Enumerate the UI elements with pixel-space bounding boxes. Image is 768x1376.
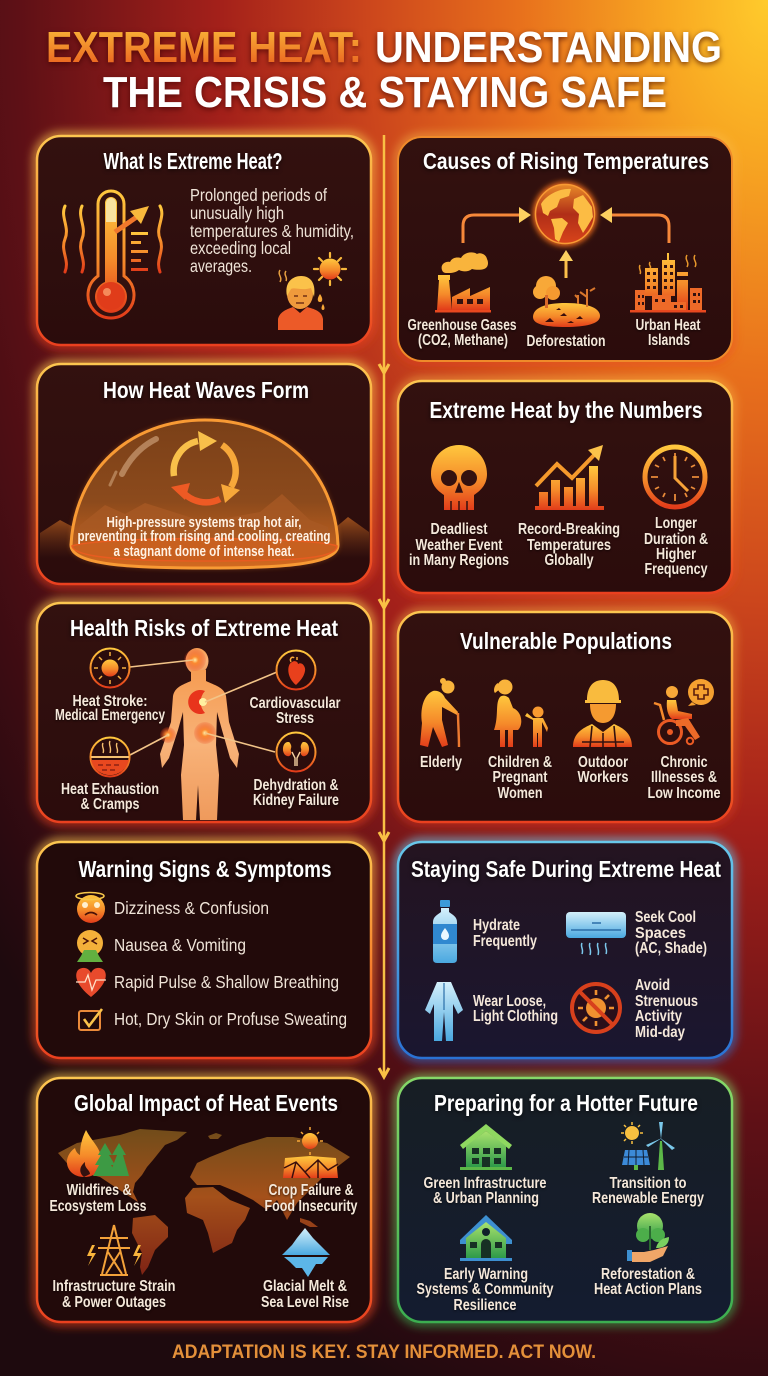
icon: air conditioner [566, 912, 626, 955]
future labels: Systems & Community [416, 1281, 554, 1298]
risk labels: Kidney Failure [253, 792, 339, 809]
safe tip: hydrate: Frequently [473, 933, 537, 950]
icon: pregnant woman and child [494, 680, 548, 747]
symptom: nausea: Nausea & Vomiting [114, 935, 246, 955]
definition text: temperatures & humidity, [190, 221, 354, 241]
risk labels: Heat Stroke: [72, 693, 148, 710]
labels: Urban Heat [636, 317, 701, 334]
future labels: Renewable Energy [592, 1190, 704, 1207]
safe tip: cool spaces [635, 909, 707, 957]
body figure with hot spots [130, 648, 277, 820]
risk labels: & Cramps [80, 796, 140, 813]
risk labels: Cardiovascular [250, 695, 340, 712]
labels: (CO2, Methane) [418, 332, 508, 349]
population labels [420, 754, 721, 802]
labels: Islands [648, 332, 690, 349]
title [46, 23, 722, 117]
stats labels: Frequency [644, 561, 708, 578]
icon: rising chart [535, 445, 604, 510]
panel: global impact [37, 1078, 371, 1322]
heading: Preparing for a Hotter Future [434, 1090, 698, 1116]
icon: drought [283, 1127, 338, 1178]
risk labels: Dehydration & [254, 777, 339, 794]
population labels: Outdoor [578, 754, 628, 771]
stats labels: Record-Breaking [518, 521, 620, 538]
impact labels: Infrastructure Strain [52, 1278, 176, 1295]
icon: city [630, 253, 706, 312]
safe tip: avoid activity: Avoid [635, 977, 670, 994]
population labels: Pregnant [492, 769, 548, 786]
safe tip: hydrate [473, 917, 537, 950]
dome explanation [78, 515, 330, 560]
safe tip: clothing: Wear Loose, [473, 993, 546, 1010]
population labels: Women [498, 785, 542, 802]
icon: globe [533, 182, 597, 246]
icon: sun circle [90, 648, 130, 688]
panel: how heat waves form [37, 364, 371, 584]
icon: power pylon [87, 1225, 142, 1275]
icon: sweating person and sun [278, 253, 346, 330]
icon: elderly [420, 678, 459, 747]
definition text [190, 185, 354, 276]
stats labels: Weather Event [416, 537, 503, 554]
stats labels: in Many Regions [409, 552, 509, 569]
icon: iceberg [282, 1228, 330, 1277]
heading: Causes of Rising Temperatures [423, 148, 709, 174]
heading: Vulnerable Populations [460, 628, 672, 654]
safe tip: cool spaces: (AC, Shade) [635, 940, 707, 957]
symptom: rapid pulse [76, 968, 339, 997]
world map [58, 1129, 350, 1275]
icon: heat exhaustion [90, 738, 130, 776]
icon: deforestation [533, 276, 600, 327]
risk labels: Medical Emergency [55, 707, 165, 724]
impact labels: Food Insecurity [264, 1198, 358, 1215]
future labels [416, 1175, 704, 1314]
panel: preparing for a hotter future [398, 1078, 732, 1322]
icon: kidneys [276, 732, 316, 772]
definition text: Prolonged periods of [190, 185, 327, 205]
labels: Deforestation [526, 333, 606, 350]
icon: clock [645, 447, 705, 507]
panel: by the numbers [398, 381, 732, 593]
dome explanation: a stagnant dome of intense heat. [114, 544, 294, 560]
icon: wheelchair and medical [654, 679, 714, 744]
future labels: Green Infrastructure [424, 1175, 547, 1192]
stats labels: Temperatures [527, 537, 611, 554]
heading: Global Impact of Heat Events [74, 1090, 338, 1116]
risk labels [55, 693, 340, 813]
definition text: unusually high [190, 203, 284, 223]
panel: staying safe [398, 842, 732, 1058]
panel: causes of rising temperatures [398, 137, 732, 361]
future labels: Resilience [454, 1297, 517, 1314]
icon: thermometer [64, 191, 162, 318]
panel: health risks [37, 603, 371, 822]
symptom: hot dry skin: Hot, Dry Skin or Profuse Sweating [114, 1009, 347, 1029]
symptom: dizziness [76, 892, 269, 923]
icon: water bottle [433, 900, 457, 963]
safe tip: avoid activity: Mid-day [635, 1024, 685, 1041]
icon: no midday sun [572, 984, 620, 1032]
future labels: Reforestation & [601, 1266, 695, 1283]
symptom: rapid pulse: Rapid Pulse & Shallow Breathing [114, 972, 339, 992]
panel: what is extreme heat [37, 136, 371, 345]
heading: How Heat Waves Form [103, 377, 309, 403]
stats labels: Globally [544, 552, 594, 569]
heading: Health Risks of Extreme Heat [70, 615, 338, 641]
icon: skull [431, 445, 487, 510]
population labels: Workers [578, 769, 629, 786]
central flow arrow [379, 135, 389, 1077]
icon: loose clothing [425, 982, 463, 1041]
symptom: nausea [77, 930, 246, 962]
icon: green house [460, 1124, 512, 1170]
population labels: Elderly [420, 754, 462, 771]
safe tip: avoid activity [635, 977, 698, 1041]
title: THE CRISIS & STAYING SAFE [103, 68, 667, 117]
safe tip: cool spaces: Seek Cool [635, 909, 696, 926]
icon: hand with plant [627, 1213, 669, 1262]
icon: heart circle [276, 650, 316, 690]
impact labels: Glacial Melt & [263, 1278, 347, 1295]
stats labels: Duration & [644, 531, 708, 548]
panel: vulnerable populations [398, 612, 732, 822]
safe tip: clothing [473, 993, 558, 1025]
risk labels: Stress [276, 710, 314, 727]
safe tip: avoid activity: Strenuous [635, 993, 698, 1010]
icon: wildfire and trees [67, 1130, 129, 1177]
future labels: Heat Action Plans [594, 1281, 702, 1298]
dome explanation: High-pressure systems trap hot air, [106, 515, 302, 531]
stats labels [409, 515, 708, 578]
future labels: Early Warning [444, 1266, 528, 1283]
safe tip: cool spaces: Spaces [635, 925, 686, 942]
population labels: Children & [488, 754, 552, 771]
illustration: heat dome [40, 420, 369, 568]
heading: What Is Extreme Heat? [104, 148, 282, 174]
symptom: dizziness: Dizziness & Confusion [114, 898, 269, 918]
icon: circular arrows [171, 431, 240, 503]
definition text: exceeding local [190, 238, 291, 258]
definition text: averages. [190, 256, 252, 276]
stats labels: Longer [655, 515, 697, 532]
impact labels: Sea Level Rise [261, 1294, 349, 1311]
labels: Greenhouse Gases [408, 317, 517, 334]
stats labels: Deadliest [430, 521, 488, 538]
heading: Warning Signs & Symptoms [78, 856, 332, 882]
impact labels: Wildfires & [66, 1182, 132, 1199]
impact labels: Crop Failure & [268, 1182, 354, 1199]
safe tip: avoid activity: Activity [635, 1008, 682, 1025]
title: UNDERSTANDING [375, 23, 722, 72]
safe tip: clothing: Light Clothing [473, 1008, 558, 1025]
population labels: Low Income [648, 785, 721, 802]
panel: warning signs [37, 842, 371, 1058]
footer tagline: ADAPTATION IS KEY. STAY INFORMED. ACT NOW. [172, 1342, 596, 1363]
dome explanation: preventing it from rising and cooling, creating [78, 529, 330, 545]
icon: factory [435, 252, 491, 312]
impact labels [50, 1182, 358, 1311]
population labels: Chronic [660, 754, 708, 771]
future labels: & Urban Planning [433, 1190, 539, 1207]
heading: Extreme Heat by the Numbers [430, 397, 702, 423]
arrows into globe [463, 207, 669, 278]
impact labels: & Power Outages [62, 1294, 166, 1311]
stats labels: Higher [656, 546, 696, 563]
title: EXTREME HEAT: [46, 23, 362, 72]
impact labels: Ecosystem Loss [50, 1198, 147, 1215]
icon: solar and wind [621, 1122, 675, 1170]
future labels: Transition to [610, 1175, 687, 1192]
risk labels: Heat Exhaustion [61, 781, 159, 798]
icon: outdoor worker [573, 680, 632, 747]
icon: community building [460, 1215, 512, 1261]
labels [408, 317, 701, 350]
safe tip: hydrate: Hydrate [473, 917, 520, 934]
population labels: Illnesses & [651, 769, 717, 786]
